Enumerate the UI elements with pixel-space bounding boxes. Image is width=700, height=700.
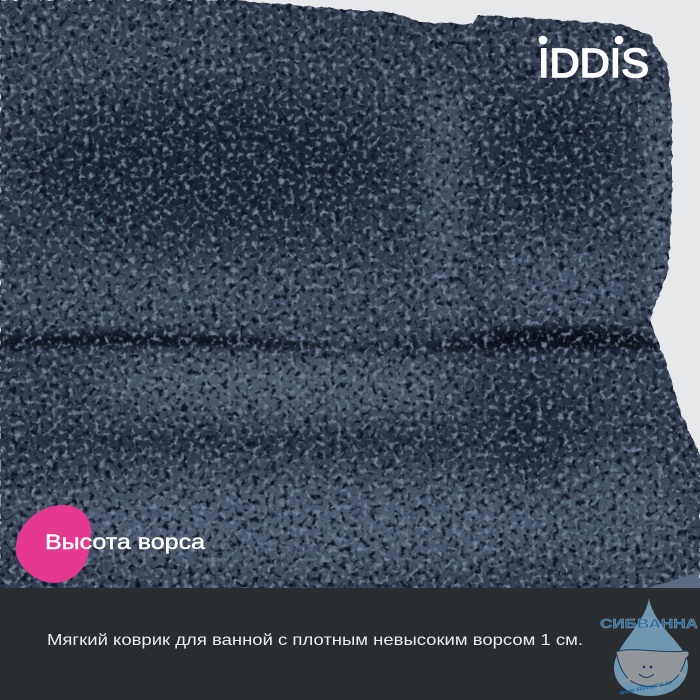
mat binding edge [648, 572, 700, 588]
bottom band [0, 588, 700, 700]
fold shadow [0, 326, 660, 351]
pink blob [16, 505, 91, 583]
brand name: СИБВАННА [600, 616, 699, 631]
icon: smiling bathtub [616, 650, 689, 690]
heading: pile height: Высота ворса [45, 531, 205, 554]
icon: water drop [614, 598, 688, 696]
brand url: www.sibvanna.ru [618, 679, 672, 697]
logo: IDDIS: IDDIS [538, 40, 649, 86]
logo: Sibvanna [600, 598, 699, 697]
caption: Мягкий коврик для ванной с плотным невысоким ворсом 1 см. [47, 632, 583, 649]
